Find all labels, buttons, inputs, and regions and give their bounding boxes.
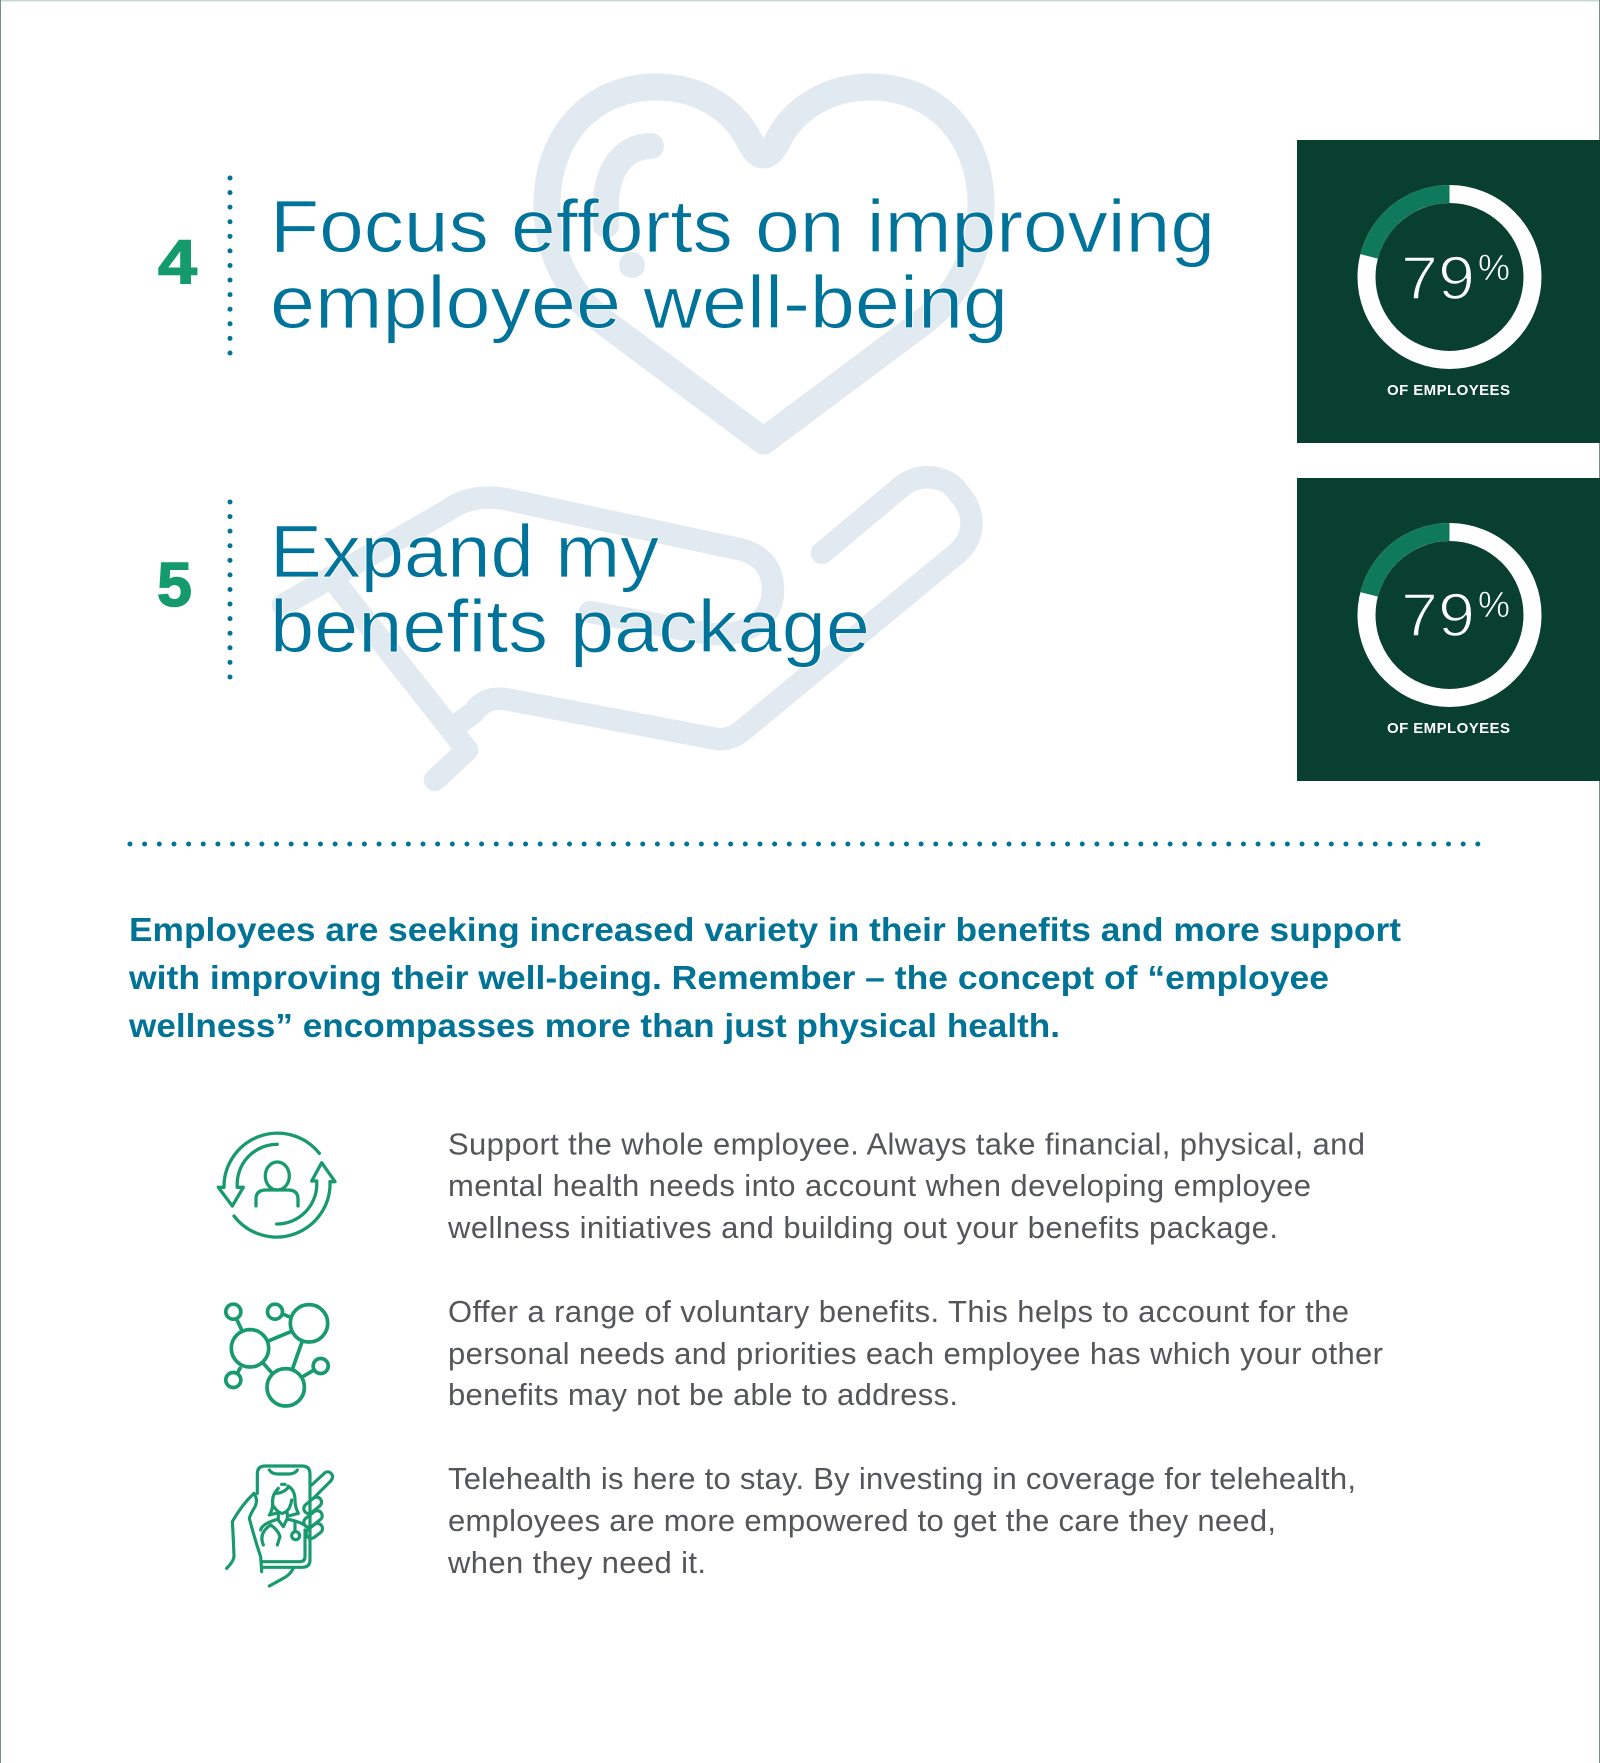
text: support the whole employee: Support the whole employee. Always take financial, physical, and (448, 1126, 1365, 1162)
intro paragraph: with improving their well-being. Remember – the concept of “employee (128, 959, 1329, 996)
text: offer a range of voluntary benefits (448, 1294, 1383, 1412)
stat panel: 79% focus on well-being: 79 (1401, 244, 1475, 312)
heading: expand my benefits package (270, 510, 870, 668)
intro paragraph (128, 911, 1401, 1044)
background icon: open hand (283, 477, 972, 780)
vertical dotted divider 5 (228, 502, 232, 677)
heading: expand my benefits package: Expand my (270, 510, 659, 593)
text: telehealth is here to stay (447, 1461, 1356, 1580)
number 4: 4 (158, 228, 198, 297)
stat panel: 79% focus on well-being: OF EMPLOYEES (1387, 382, 1510, 399)
background icon: heart (547, 87, 981, 441)
stat panel: 79% focus on well-being: % (1478, 247, 1510, 288)
intro paragraph: Employees are seeking increased variety in their benefits and more support (129, 911, 1401, 948)
text: telehealth is here to stay: when they need it. (447, 1545, 706, 1580)
intro paragraph: wellness” encompasses more than just physical health. (128, 1007, 1060, 1044)
text: telehealth is here to stay: employees are more empowered to get the care they need, (448, 1503, 1276, 1538)
text: support the whole employee: mental health needs into account when developing employee (448, 1168, 1311, 1203)
icon: connected nodes (226, 1304, 328, 1406)
heading: focus efforts on improving employee well-being: Focus efforts on improving (270, 185, 1215, 268)
stat panel: 79% focus on well-being (1297, 140, 1600, 443)
stat panel: 79% expand benefits (1297, 478, 1600, 781)
stat panel: 79% expand benefits: % (1478, 584, 1510, 625)
text: support the whole employee (447, 1126, 1365, 1245)
text: support the whole employee: wellness initiatives and building out your benefits package. (447, 1210, 1278, 1245)
heading: focus efforts on improving employee well-being: employee well-being (270, 261, 1008, 344)
icon: telehealth phone in hand (227, 1466, 333, 1586)
horizontal dotted divider (130, 842, 1480, 846)
text: telehealth is here to stay: Telehealth is here to stay. By investing in coverage for telehealth, (448, 1461, 1356, 1496)
stat panel: 79% expand benefits: OF EMPLOYEES (1387, 720, 1510, 737)
heading: expand my benefits package: benefits package (270, 585, 870, 668)
heading: focus efforts on improving employee well-being (270, 185, 1215, 344)
text: offer a range of voluntary benefits: Offer a range of voluntary benefits. This helps to account for the (448, 1294, 1349, 1329)
vertical dotted divider 4 (228, 178, 232, 353)
text: offer a range of voluntary benefits: personal needs and priorities each employee has which your other (448, 1336, 1383, 1371)
number 5: 5 (157, 551, 192, 620)
stat panel: 79% expand benefits: 79 (1401, 581, 1475, 649)
icon: person in cycle arrows (218, 1133, 335, 1237)
text: offer a range of voluntary benefits: benefits may not be able to address. (448, 1377, 958, 1412)
